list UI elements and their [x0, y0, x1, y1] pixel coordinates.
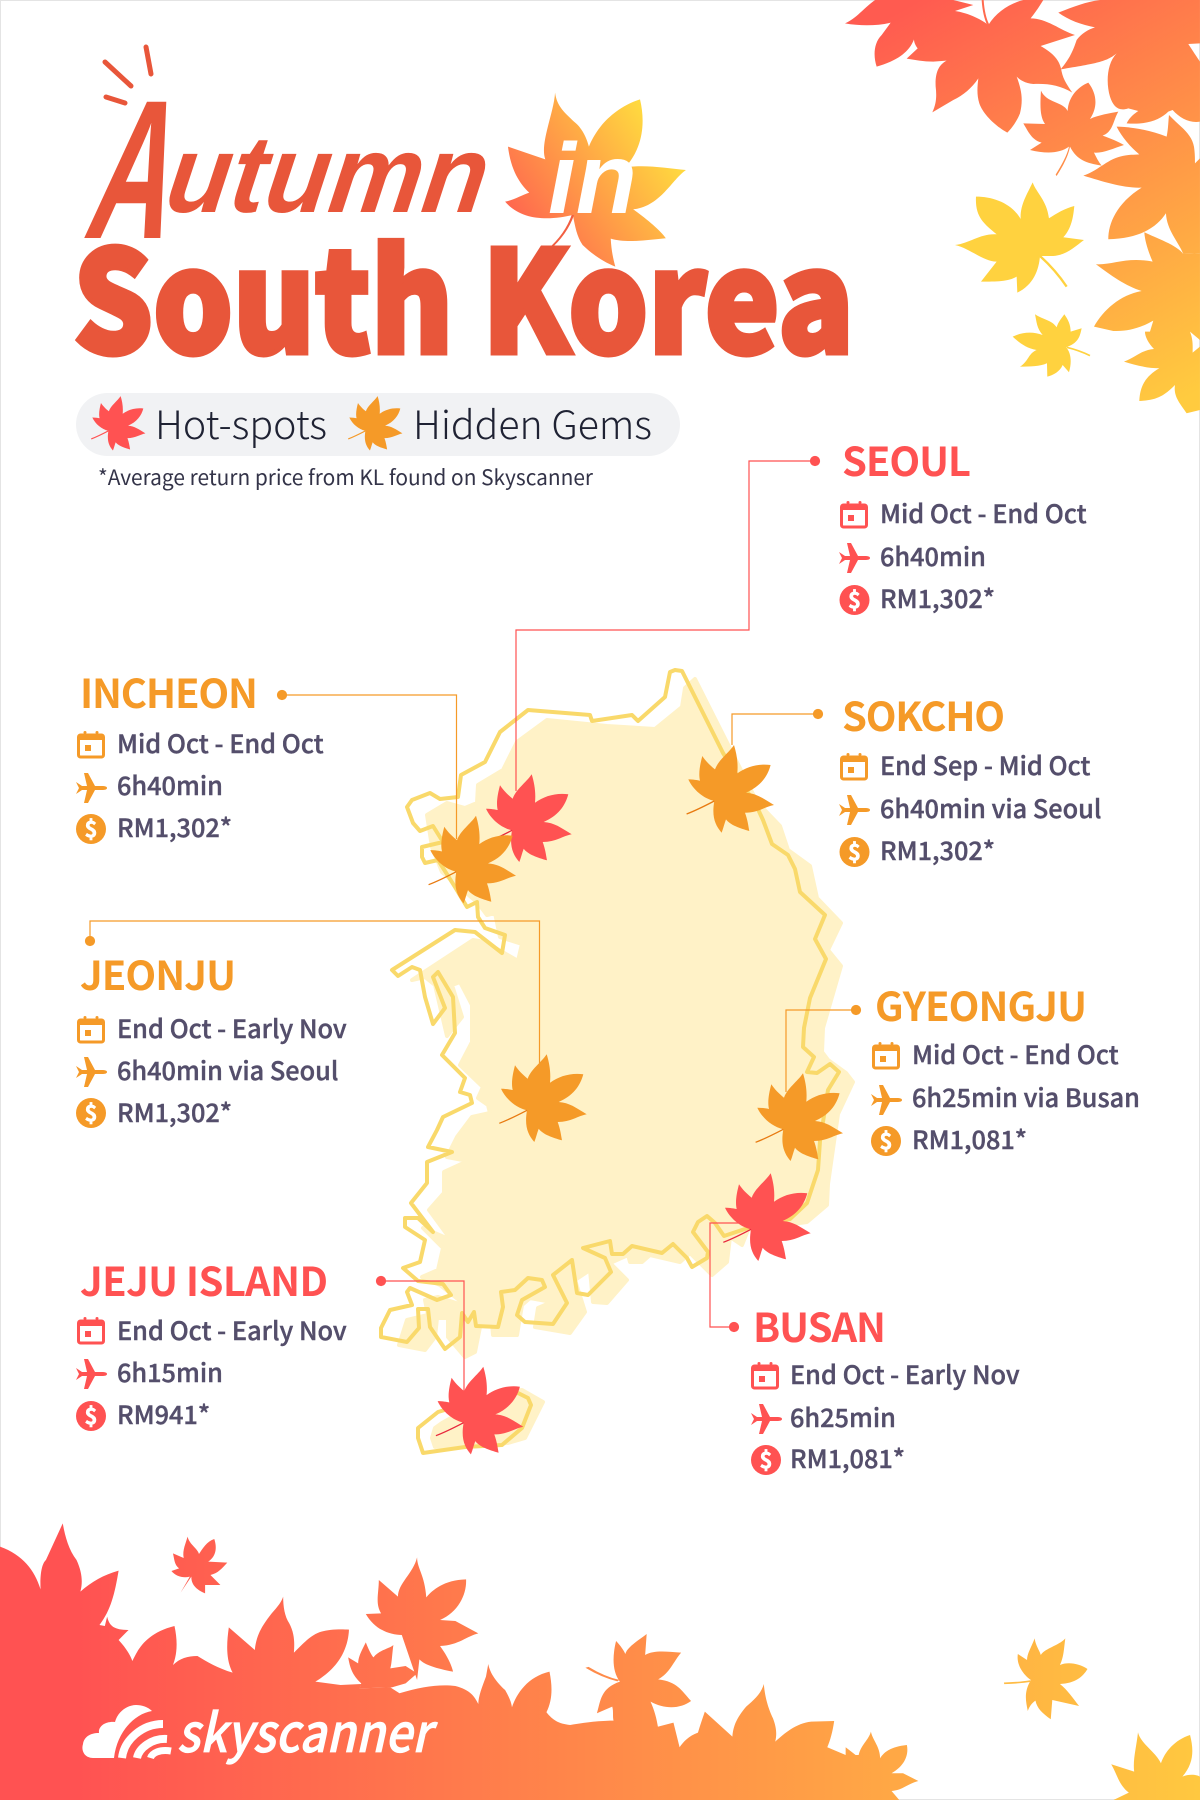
icon: dollar: $: [760, 1443, 772, 1475]
Jeju island fill: [432, 1390, 543, 1447]
flight time: 6h25min: [790, 1399, 896, 1435]
map of South Korea: [381, 670, 853, 1453]
heading: INCHEON: [80, 662, 258, 720]
connector: Busan: [710, 1223, 745, 1332]
map leaf: Busan: [723, 1173, 811, 1261]
panel: Jeju Island: [76, 1250, 347, 1432]
map leaf: Seoul: [484, 774, 572, 862]
map leaf: Gyeongju: [756, 1073, 843, 1161]
connector: Incheon: [278, 690, 456, 839]
flight time: 6h15min: [117, 1354, 223, 1390]
icon: dollar: [76, 1399, 106, 1431]
map leaf: Jeju: [436, 1367, 523, 1454]
legend label: hot-spots: Hot-spots: [155, 395, 327, 451]
title: [73, 47, 854, 394]
title: Autumn: [78, 60, 505, 281]
Jeju island outline: [418, 1393, 531, 1453]
dates: End Oct - Early Nov: [790, 1356, 1020, 1392]
flight time: 6h25min via Busan: [912, 1079, 1140, 1115]
icon: hot-spot leaf: [91, 396, 145, 451]
flight time: 6h40min via Seoul: [880, 790, 1101, 826]
heading: SOKCHO: [842, 685, 1005, 743]
icon: plane: [839, 543, 870, 573]
price: RM1,302*: [117, 1094, 232, 1130]
icon: plane: [76, 773, 107, 803]
flight time: 6h40min via Seoul: [117, 1052, 338, 1088]
icon: calendar: [874, 1042, 898, 1068]
heading: GYEONGJU: [875, 975, 1087, 1033]
title: Autumn: utumn: [160, 113, 497, 236]
connector: Jeonju: [86, 921, 540, 1063]
map fill: [399, 679, 853, 1357]
price: RM1,081*: [790, 1440, 905, 1476]
price: RM1,302*: [880, 832, 995, 868]
heading: SEOUL: [842, 430, 971, 488]
dates: End Sep - Mid Oct: [880, 747, 1090, 783]
icon: dollar: $: [848, 835, 861, 867]
title sparkle marks: [105, 47, 151, 103]
icon: dollar: [840, 835, 870, 867]
heading: JEONJU: [80, 944, 236, 1002]
dates: End Oct - Early Nov: [117, 1010, 347, 1046]
icon: dollar: $: [880, 1124, 892, 1156]
connector: Gyeongju: [786, 1006, 860, 1092]
connector: Jeju: [376, 1276, 464, 1394]
heading: JEJU ISLAND: [80, 1250, 328, 1308]
flight time: 6h40min: [880, 538, 986, 574]
connector: Seoul: [516, 456, 820, 791]
legend pill background: [76, 393, 680, 456]
skyscanner logo: [82, 1692, 438, 1768]
bottom foliage: [0, 1523, 1200, 1800]
price: RM1,302*: [117, 809, 232, 845]
icon: dollar: $: [85, 1096, 97, 1128]
price: RM1,302*: [880, 580, 995, 616]
icon: plane: [871, 1085, 902, 1115]
dates: Mid Oct - End Oct: [912, 1036, 1119, 1072]
title: in: in: [548, 123, 637, 235]
map leaf: Jeonju: [499, 1054, 587, 1142]
icon: plane: [839, 795, 870, 825]
map leaf: Incheon: [429, 816, 516, 903]
dates: End Oct - Early Nov: [117, 1312, 347, 1348]
icon: dollar: [76, 1096, 106, 1128]
icon: skyscanner cloud: [82, 1705, 171, 1758]
icon: calendar: [752, 1362, 778, 1388]
yellow falling leaves: top right: [955, 182, 1090, 377]
icon: dollar: [840, 583, 870, 615]
icon: dollar: [751, 1443, 781, 1475]
icon: hidden gem leaf: [348, 396, 402, 451]
icon: dollar: $: [848, 583, 861, 615]
icon: dollar: [76, 812, 106, 844]
logo wordmark: skyscanner: [177, 1692, 438, 1768]
leaf behind in: [505, 93, 686, 267]
icon: plane: [76, 1359, 107, 1389]
panel: Seoul: [839, 430, 1087, 616]
price: RM941*: [117, 1396, 210, 1432]
title: South Korea: South Korea: [73, 189, 854, 394]
footnote: *Average return price from KL found on Skyscanner: [98, 462, 594, 492]
connector: Sokcho: [732, 710, 822, 745]
map outline: [381, 670, 839, 1349]
dates: Mid Oct - End Oct: [117, 725, 324, 761]
heading: BUSAN: [753, 1296, 886, 1354]
icon: calendar: [78, 1016, 104, 1042]
title: Autumn: A: [78, 60, 194, 281]
flight time: 6h40min: [117, 767, 223, 803]
icon: calendar: [842, 753, 866, 779]
panel: Incheon: [76, 662, 324, 845]
panel: Busan: [751, 1296, 1020, 1476]
icon: plane: [76, 1057, 107, 1087]
legend label: hidden gems: Hidden Gems: [413, 395, 652, 451]
icon: dollar: $: [85, 812, 97, 844]
panel: Jeonju: [76, 944, 347, 1130]
corner foliage: top right: [845, 0, 1200, 413]
icon: calendar: [78, 731, 104, 757]
icon: dollar: [871, 1124, 901, 1156]
icon: calendar: [842, 501, 866, 527]
icon: calendar: [78, 1317, 104, 1343]
icon: dollar: $: [85, 1399, 97, 1431]
legend: [76, 393, 680, 456]
panel: Sokcho: [839, 685, 1101, 868]
price: RM1,081*: [912, 1121, 1027, 1157]
dates: Mid Oct - End Oct: [880, 495, 1087, 531]
panel: Gyeongju: [871, 975, 1140, 1157]
icon: plane: [751, 1404, 782, 1434]
map leaf: Sokcho: [687, 745, 774, 833]
